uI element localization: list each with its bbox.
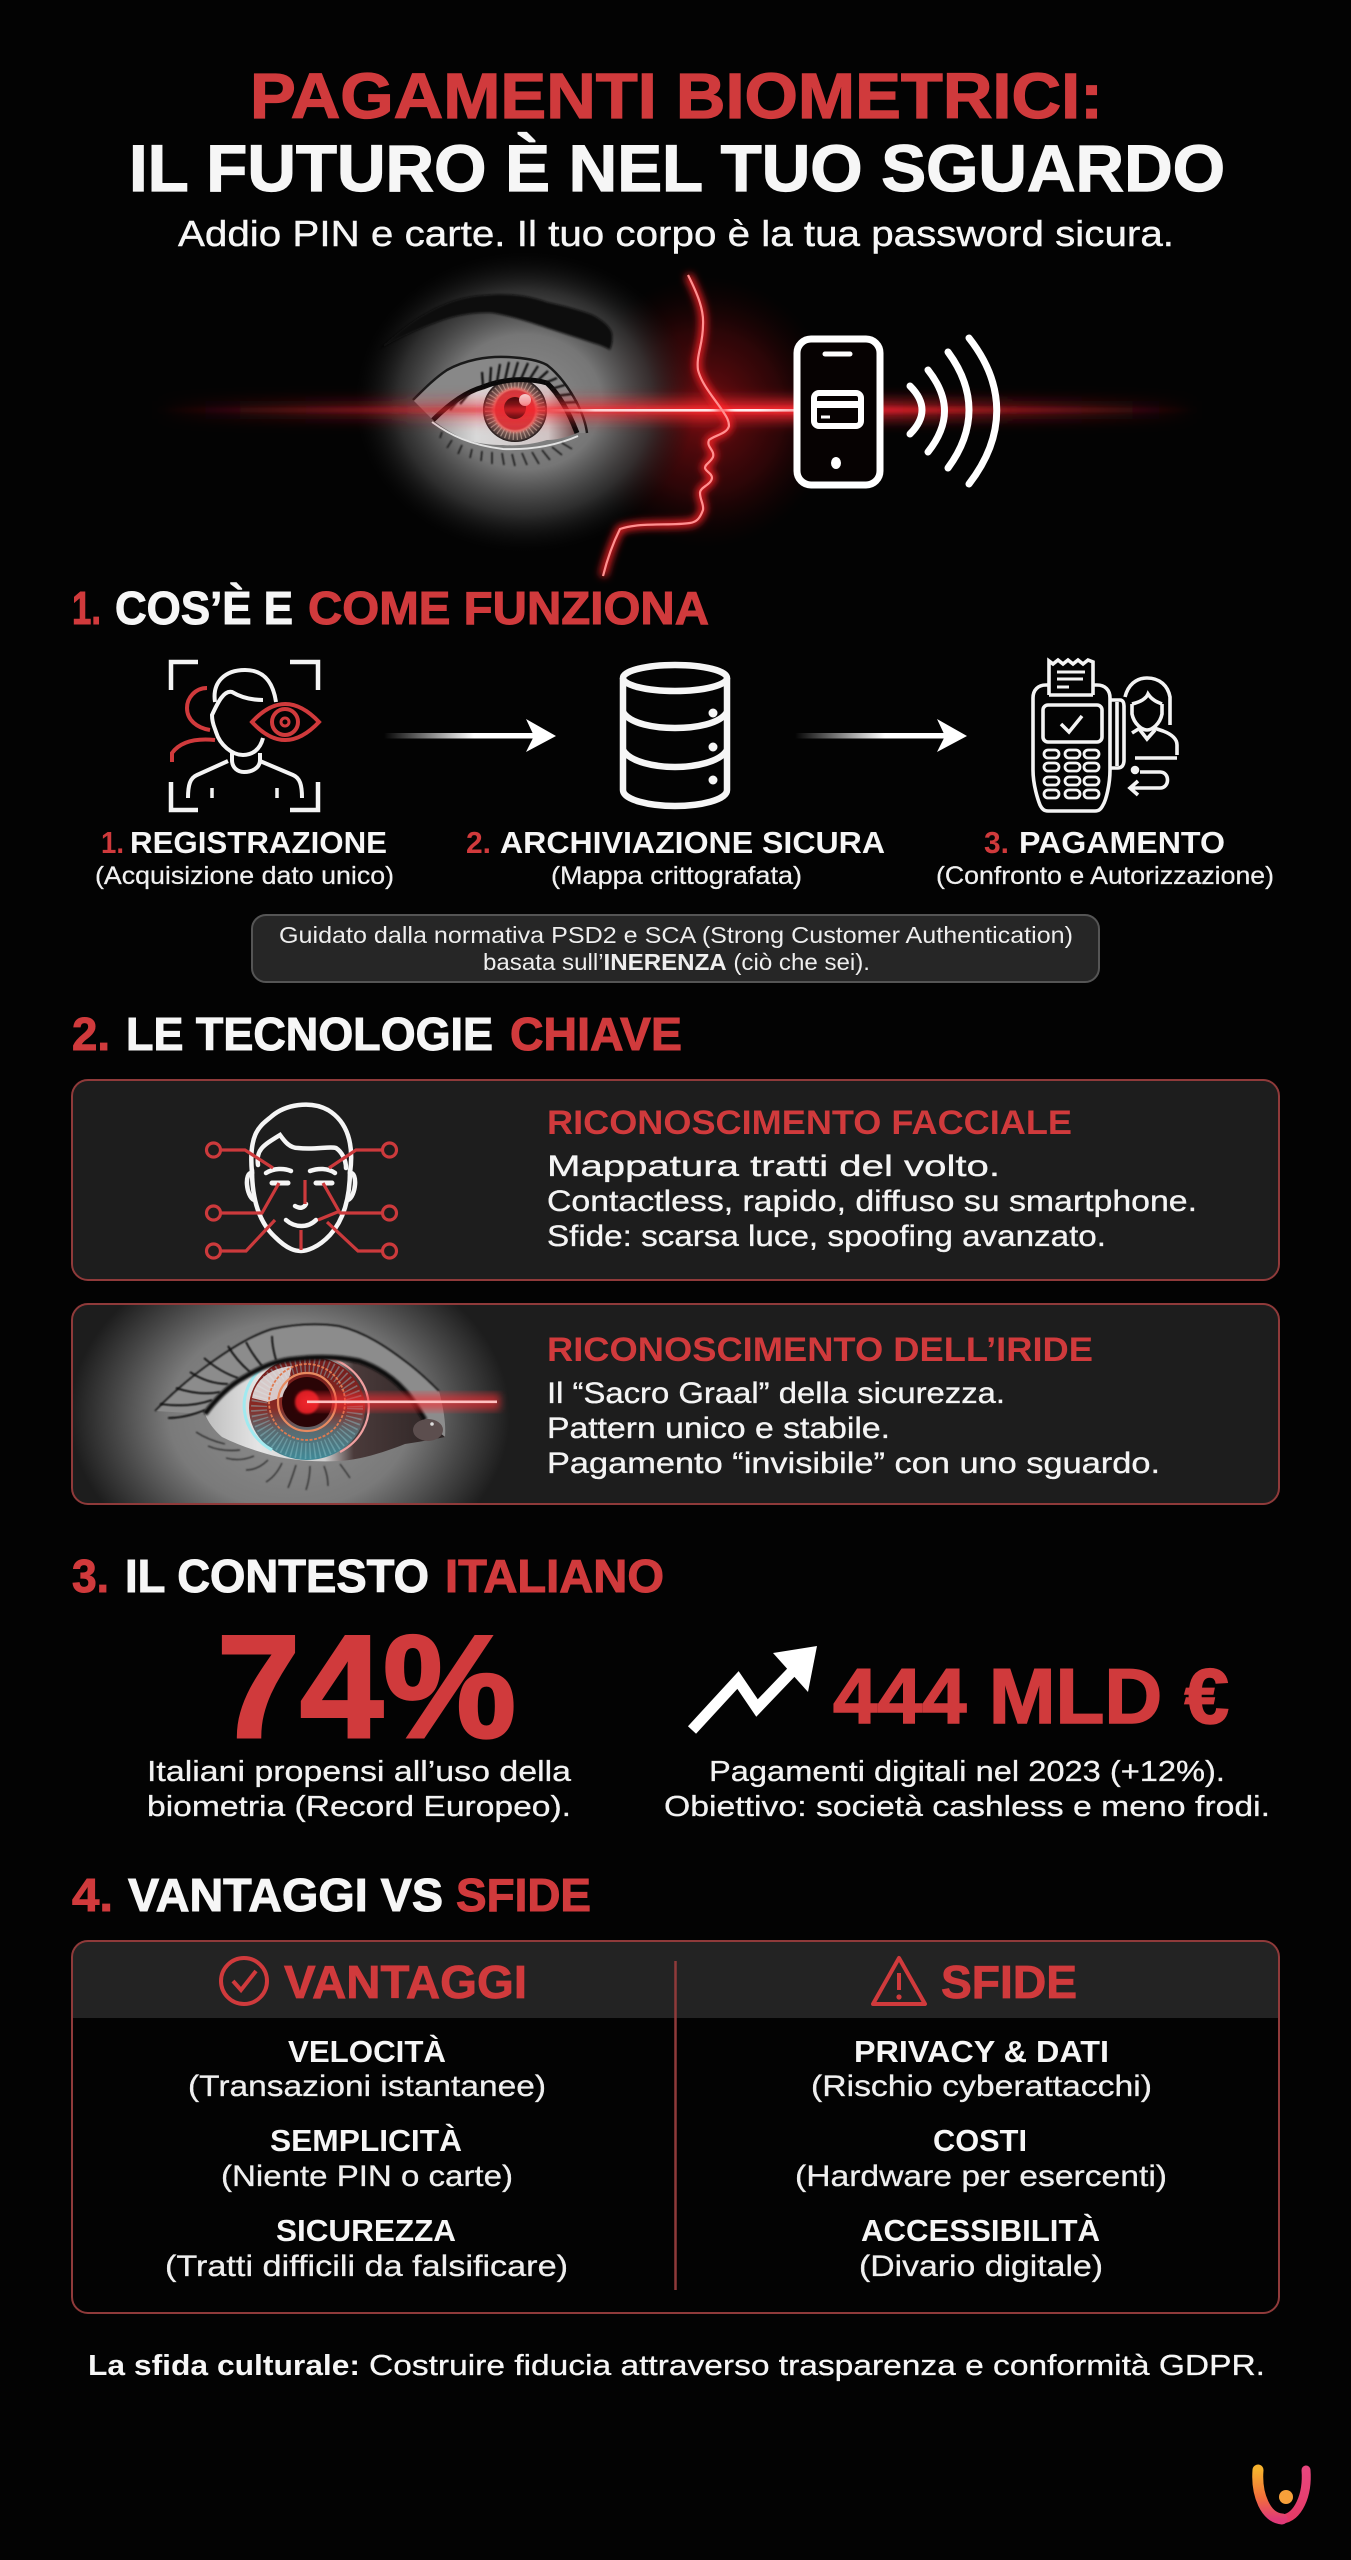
iris recognition text xyxy=(547,1331,1160,1480)
challenges list: (Rischio cyberattacchi) xyxy=(811,2070,1152,2103)
callout: PSD2 and SCA: basata sull’INERENZA (ciò che sei). xyxy=(483,949,870,975)
icon: contactless waves xyxy=(910,338,997,484)
subtitle: Addio PIN e carte. Il tuo corpo è la tua password sicura. xyxy=(178,213,1174,254)
step 1 label xyxy=(95,825,394,890)
challenges list: (Hardware per esercenti) xyxy=(795,2160,1167,2193)
challenges header xyxy=(873,1956,1077,2008)
step 3 label: (Confronto e Autorizzazione) xyxy=(936,862,1274,890)
footer note: Costruire fiducia attraverso trasparenza e conformità GDPR. xyxy=(369,2350,1265,2382)
step 2 label: (Mappa crittografata) xyxy=(551,862,802,890)
section heading 4: VANTAGGI VS xyxy=(128,1869,443,1921)
stat: 74% xyxy=(147,1605,572,1823)
facial recognition text: RICONOSCIMENTO FACCIALE xyxy=(547,1104,1072,1142)
challenges list: PRIVACY & DATI xyxy=(854,2034,1109,2069)
laser beam xyxy=(155,401,1198,419)
section heading 1: 1. xyxy=(72,582,101,634)
step 3 label: 3. xyxy=(984,825,1009,860)
facial recognition text xyxy=(547,1104,1197,1253)
advantages list: SEMPLICITÀ xyxy=(270,2123,462,2158)
iris recognition text: Pattern unico e stabile. xyxy=(547,1412,890,1445)
step 2 label xyxy=(466,825,885,890)
hero illustration: eye, profile, laser and phone xyxy=(155,252,1198,576)
advantages list: (Niente PIN o carte) xyxy=(221,2160,513,2193)
title: IL FUTURO È NEL TUO SGUARDO xyxy=(129,131,1225,205)
challenges list: COSTI xyxy=(933,2123,1027,2158)
title xyxy=(129,60,1225,205)
challenges list: ACCESSIBILITÀ xyxy=(861,2213,1100,2248)
section heading 3 xyxy=(72,1550,664,1602)
challenges list xyxy=(795,2034,1167,2283)
advantages list: (Tratti difficili da falsificare) xyxy=(165,2250,568,2283)
arrow xyxy=(384,719,556,752)
challenges header: SFIDE xyxy=(941,1956,1077,2008)
facial recognition text: Mappatura tratti del volto. xyxy=(547,1150,1000,1183)
step 2 label: 2. xyxy=(466,825,491,860)
icon: face mapping xyxy=(206,1105,396,1258)
advantages header: VANTAGGI xyxy=(284,1956,527,2008)
advantages list: VELOCITÀ xyxy=(288,2034,446,2069)
iris recognition text: Pagamento “invisibile” con uno sguardo. xyxy=(547,1447,1160,1480)
facial recognition text: Sfide: scarsa luce, spoofing avanzato. xyxy=(547,1220,1106,1253)
section heading 3: IL CONTESTO xyxy=(125,1550,429,1602)
stat: 444 MLD euro: 444 MLD € xyxy=(833,1652,1229,1740)
step 1 label: 1. xyxy=(101,825,124,860)
section heading 3: 3. xyxy=(72,1550,109,1602)
panel: iris recognition xyxy=(71,1303,1280,1505)
red glow around profile xyxy=(575,277,835,547)
facial recognition text: Contactless, rapido, diffuso su smartphone. xyxy=(547,1185,1197,1218)
advantages list: (Transazioni istantanee) xyxy=(188,2070,546,2103)
section heading 3: ITALIANO xyxy=(445,1550,664,1602)
advantages list xyxy=(165,2034,568,2283)
icon: phone with card xyxy=(797,339,880,485)
challenges list: (Divario digitale) xyxy=(859,2250,1103,2283)
stat: 74%: biometria (Record Europeo). xyxy=(147,1791,571,1823)
icon: secure database xyxy=(623,665,727,806)
section heading 1: COS’È E xyxy=(115,582,293,634)
panel: facial recognition xyxy=(72,1080,1279,1280)
step 1 label: REGISTRAZIONE xyxy=(130,825,387,860)
stat: 444 MLD euro: Pagamenti digitali nel 2023 (+12%). xyxy=(709,1756,1225,1788)
iris recognition text: Il “Sacro Graal” della sicurezza. xyxy=(547,1377,1005,1410)
step 1 label: (Acquisizione dato unico) xyxy=(95,862,394,890)
iris recognition text: RICONOSCIMENTO DELL’IRIDE xyxy=(547,1331,1093,1369)
footer note xyxy=(88,2350,1265,2382)
section heading 4: 4. xyxy=(72,1869,113,1921)
step 3 label xyxy=(936,825,1274,890)
face with eye xyxy=(370,266,688,538)
callout: PSD2 and SCA: Guidato dalla normativa PSD2 e SCA (Strong Customer Authentication) xyxy=(279,922,1073,948)
iris photo xyxy=(79,1305,506,1503)
section heading 1: COME FUNZIONA xyxy=(308,582,709,634)
panel: advantages vs challenges xyxy=(72,1941,1279,2313)
stat: 74%: 74% xyxy=(217,1605,516,1768)
callout: PSD2 and SCA xyxy=(252,915,1099,982)
section heading 2: CHIAVE xyxy=(510,1008,682,1060)
stat: 444 MLD euro: Obiettivo: società cashless e meno frodi. xyxy=(664,1791,1270,1823)
section heading 4: SFIDE xyxy=(456,1869,591,1921)
icon: rising arrow xyxy=(692,1646,817,1730)
section heading 1 xyxy=(72,582,709,634)
logo xyxy=(1258,2470,1306,2519)
advantages list: SICUREZZA xyxy=(276,2213,456,2248)
section heading 2 xyxy=(72,1008,682,1060)
section heading 2: 2. xyxy=(72,1008,110,1060)
title: PAGAMENTI BIOMETRICI: xyxy=(250,60,1103,132)
section heading 2: LE TECNOLOGIE xyxy=(126,1008,493,1060)
section heading 4 xyxy=(72,1869,591,1921)
arrow xyxy=(795,719,967,752)
stat: 74%: Italiani propensi all’uso della xyxy=(147,1756,572,1788)
icon: POS payment terminal xyxy=(1033,660,1177,811)
profile line xyxy=(603,275,729,576)
step 2 label: ARCHIVIAZIONE SICURA xyxy=(500,825,885,860)
step 3 label: PAGAMENTO xyxy=(1019,825,1225,860)
stat: 444 MLD euro xyxy=(664,1652,1270,1823)
footer note: La sfida culturale: xyxy=(88,2350,360,2382)
icon: biometric registration xyxy=(171,662,319,810)
